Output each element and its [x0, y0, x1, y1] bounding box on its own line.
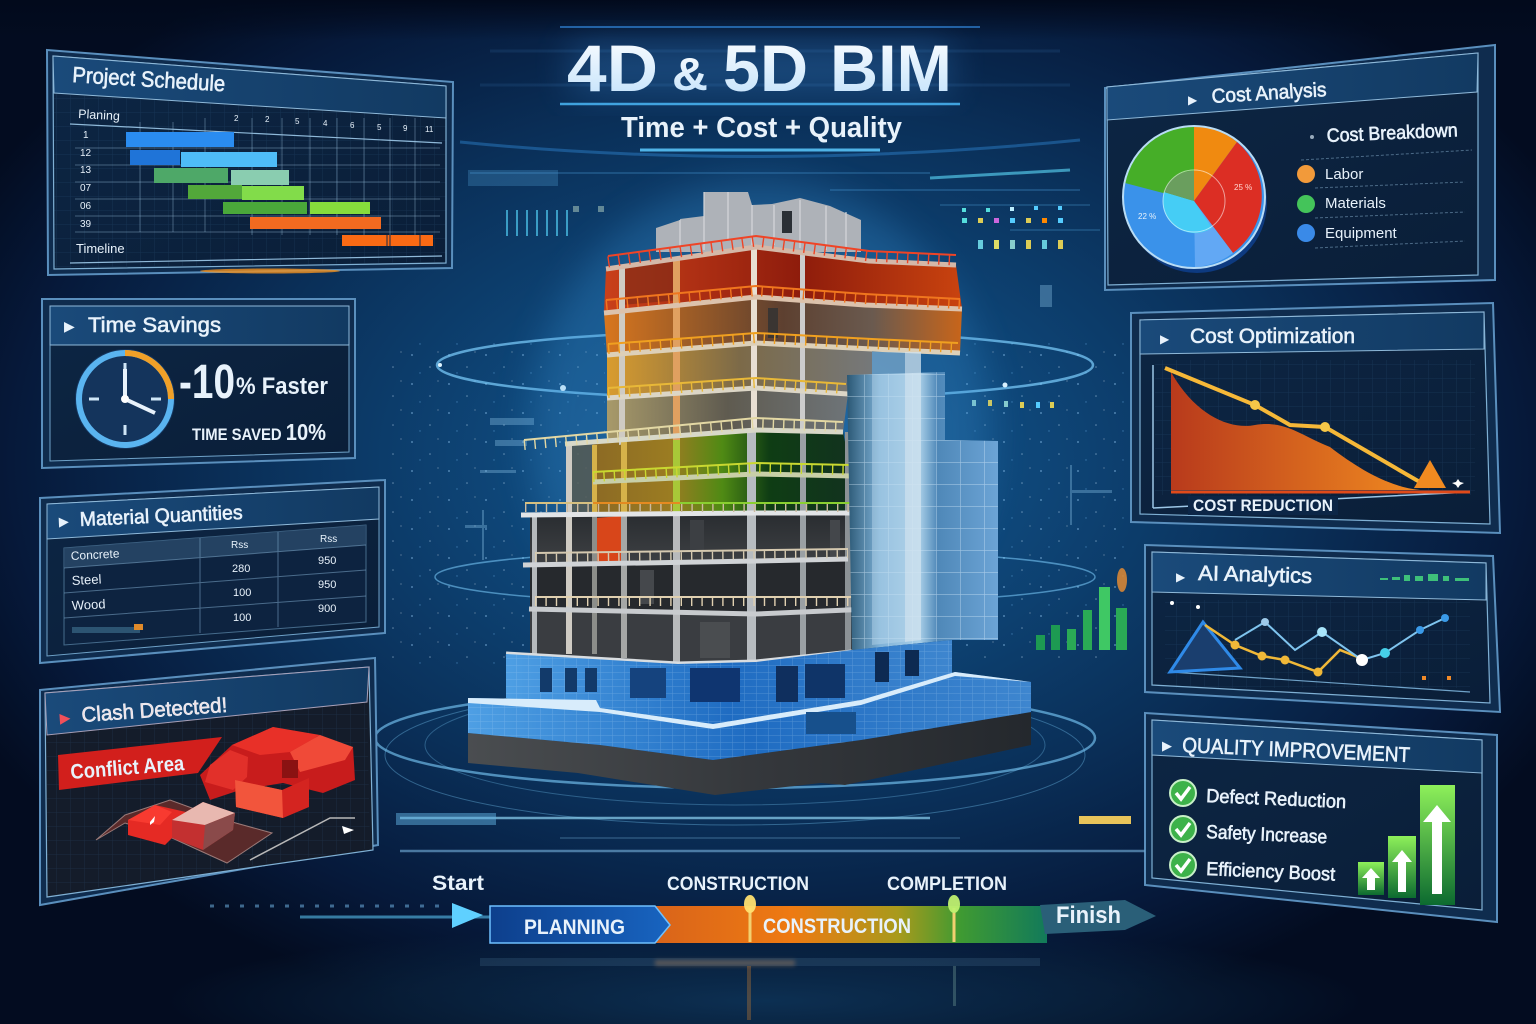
blue podium [506, 640, 952, 724]
phase: planning [490, 906, 670, 943]
checklist: Defect Reduction [1206, 786, 1347, 813]
heading: cost optimization: ▶ [1160, 332, 1170, 346]
blue base walls [468, 672, 1031, 760]
icon: clock [75, 349, 175, 449]
heading: quality improvement: ▶ [1162, 738, 1172, 753]
background particles [385, 340, 1130, 670]
icon: cursor arrow [342, 826, 354, 834]
pie chart: 25 % [1234, 183, 1252, 192]
heading: project schedule: Project Schedule [72, 62, 226, 96]
construction label: CONSTRUCTION [667, 874, 809, 895]
panel: cost analysis [1105, 45, 1495, 290]
materials table: 100 [233, 587, 251, 599]
header light streaks [460, 27, 1080, 190]
materials table: 950 [318, 555, 336, 567]
legend: Cost Breakdown [1326, 120, 1458, 147]
phase: finish arrow [1040, 900, 1156, 934]
panel: project schedule [47, 50, 453, 275]
phase: construction [655, 895, 1047, 943]
heading: quality improvement: QUALITY IMPROVEMENT [1182, 734, 1411, 767]
heading: cost analysis: Cost Analysis [1211, 79, 1327, 108]
side data fragments [465, 285, 1112, 560]
glass curtain wall tower [847, 352, 998, 650]
heading: ai analytics: AI Analytics [1198, 562, 1312, 588]
gantt labels: 5 [295, 117, 300, 126]
line chart [1170, 601, 1451, 680]
materials table: Rss [231, 540, 248, 551]
materials table: Rss [320, 534, 337, 545]
heading: material quantities: ▶ [58, 514, 69, 529]
gantt labels [78, 107, 434, 230]
materials table: 950 [318, 579, 336, 591]
subtitle: Time + Cost + Quality [621, 112, 902, 144]
checklist: Efficiency Boost [1206, 859, 1336, 886]
gantt chart [75, 118, 440, 246]
gantt labels: 2 [265, 115, 270, 124]
materials table: 280 [232, 563, 250, 575]
title: BIM [830, 31, 952, 105]
heading: time savings: ▶ [64, 318, 75, 334]
pie chart: 22 % [1138, 212, 1156, 221]
gantt labels: Planing [78, 107, 120, 123]
gantt labels: 5 [377, 123, 382, 132]
gantt labels: 9 [403, 124, 408, 133]
gantt labels: 6 [350, 121, 355, 130]
legend [1297, 120, 1472, 248]
ring glints [438, 363, 1008, 391]
panel: time savings: % Faster [236, 373, 328, 400]
legend: Materials [1325, 195, 1386, 212]
title: & [672, 48, 708, 100]
heading: clash detected: ▶ [59, 709, 71, 726]
red 3D conflict blocks [96, 727, 355, 863]
gantt labels: 2 [234, 114, 239, 123]
panel: quality improvement [1145, 713, 1497, 922]
gantt labels: 06 [80, 201, 92, 212]
gantt labels: 12 [80, 148, 92, 159]
completion label: COMPLETION [887, 874, 1007, 895]
checklist: Safety Increase [1206, 822, 1328, 848]
orbit rings behind building [375, 331, 1095, 825]
heading: ai analytics: ▶ [1176, 570, 1186, 584]
materials table: Wood [71, 596, 106, 613]
central floating bar chart [1036, 568, 1127, 650]
columns [532, 248, 851, 664]
gantt labels: 4 [323, 119, 328, 128]
upper floors tint red to gold [530, 247, 962, 664]
legend: Equipment [1325, 225, 1398, 242]
timeline label: Timeline [76, 241, 125, 256]
checklist [1170, 780, 1347, 886]
floor reflections [480, 958, 1040, 1020]
pie chart [1123, 126, 1267, 273]
panel: material quantities [40, 480, 385, 663]
heading: material quantities: Material Quantities [79, 502, 243, 531]
stat: time saved: TIME SAVED 10% [192, 419, 326, 445]
heading: clash detected: Clash Detected! [81, 694, 228, 727]
dark plinth [468, 712, 1031, 795]
materials table: 100 [233, 612, 251, 624]
phase: planning: PLANNING [524, 916, 625, 939]
gantt labels: 11 [425, 125, 434, 134]
gantt labels: 39 [80, 219, 92, 230]
title [567, 31, 952, 105]
panel: cost optimization [1131, 303, 1500, 533]
title: 5D [723, 31, 808, 105]
timeline bar [210, 872, 1156, 1020]
materials table [64, 525, 366, 645]
panel: ai analytics [1145, 545, 1500, 712]
arrow: start [300, 903, 500, 928]
materials table: Concrete [70, 546, 120, 563]
colored railings [524, 236, 960, 602]
gantt labels: 13 [80, 165, 92, 176]
label: cost reduction: COST REDUCTION [1193, 496, 1333, 515]
panel: time savings [42, 299, 355, 468]
building glow [530, 180, 990, 680]
gantt labels: 1 [83, 130, 89, 141]
gantt labels: 07 [80, 183, 92, 194]
area line chart [1153, 365, 1470, 508]
slabs [506, 247, 962, 664]
materials table: 900 [318, 603, 336, 615]
digital data squares top right [940, 205, 1100, 408]
start label: Start [432, 872, 484, 895]
materials table: Steel [71, 571, 102, 588]
lower light streaks [396, 813, 1145, 851]
phase: construction: CONSTRUCTION [763, 915, 911, 938]
heading: cost analysis: ▶ [1188, 93, 1198, 107]
heading: time savings: Time Savings [88, 314, 221, 337]
conflict area banner: Conflict Area [70, 752, 185, 784]
heading: cost optimization: Cost Optimization [1190, 325, 1355, 348]
phase: finish arrow: Finish [1056, 902, 1121, 929]
title: 4D [567, 31, 658, 105]
stat: 10 percent faster: -10 [179, 356, 235, 409]
digital data bars top left [506, 206, 604, 236]
building model [468, 192, 1031, 795]
panel: clash detected [40, 658, 378, 905]
growth bars with arrows [1358, 785, 1455, 905]
roof blocks [656, 192, 861, 255]
legend: Labor [1325, 166, 1363, 183]
conflict area banner [58, 737, 222, 790]
